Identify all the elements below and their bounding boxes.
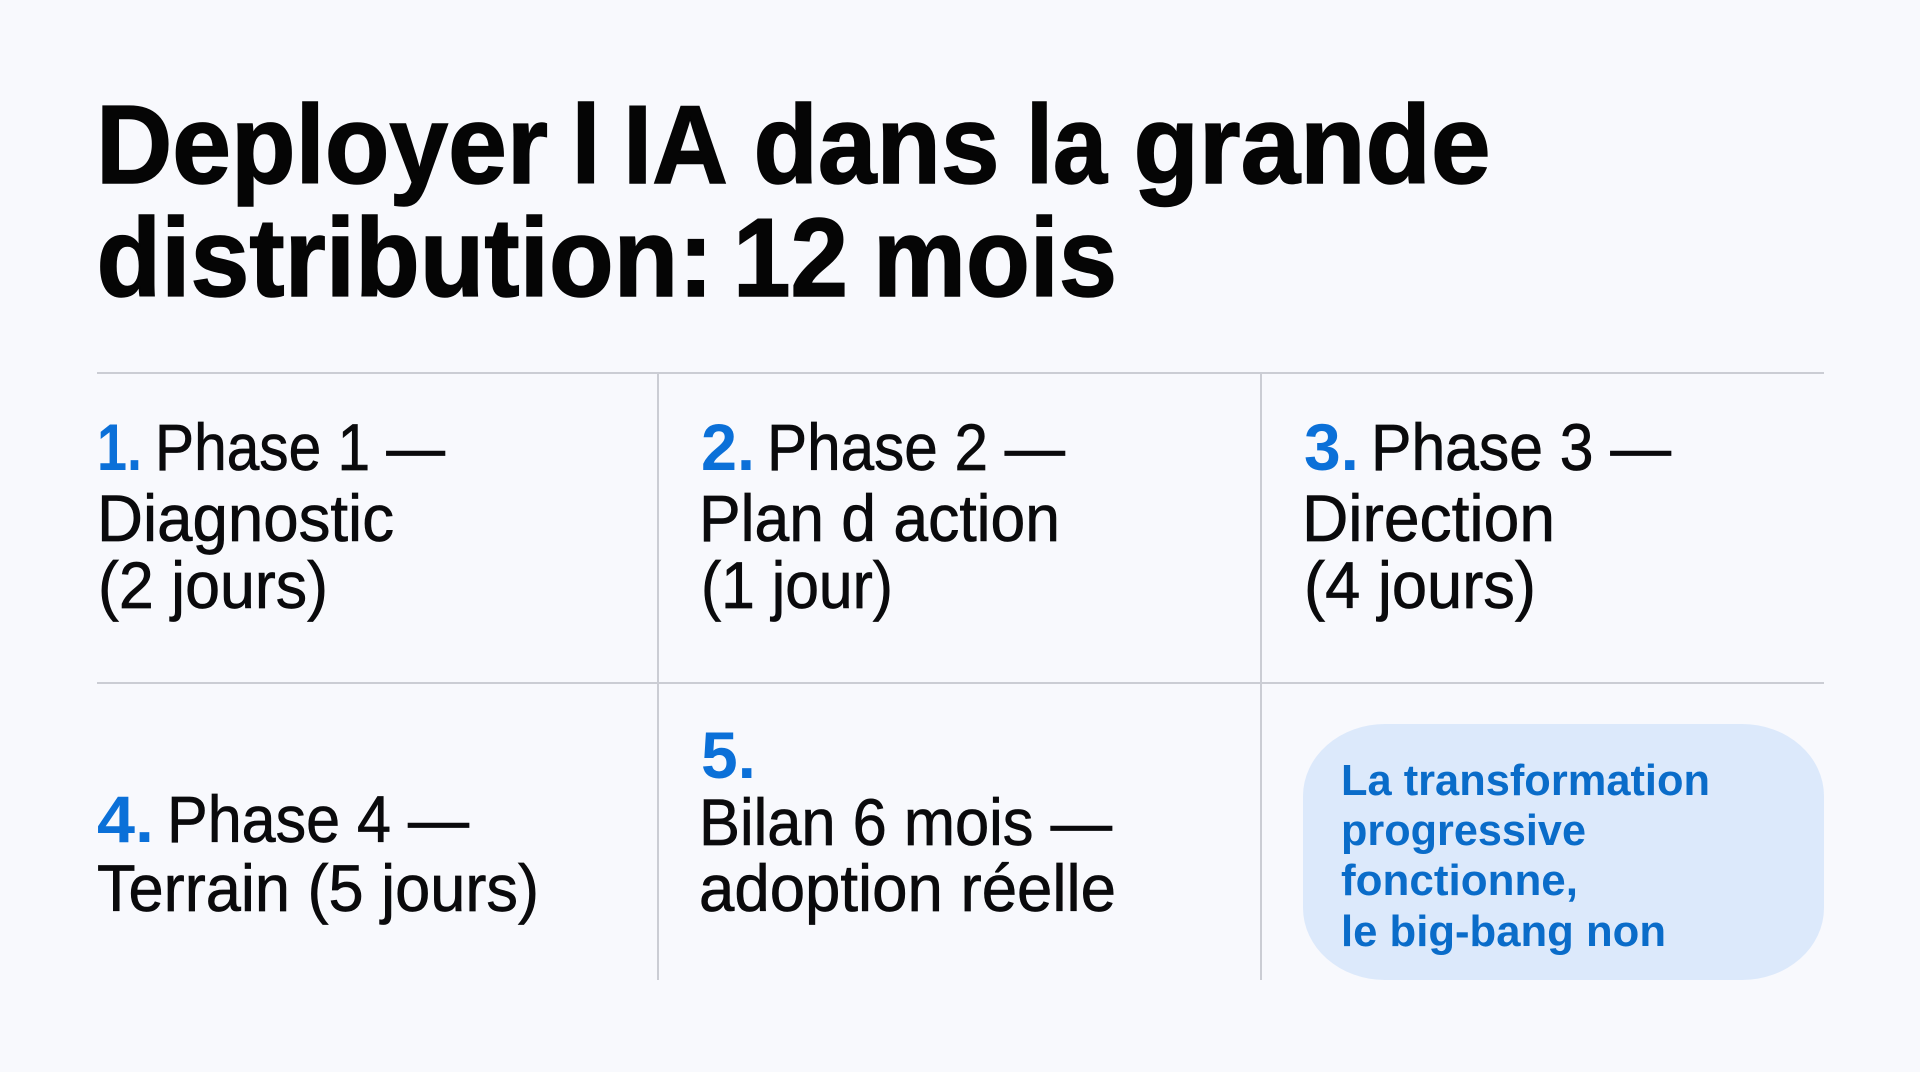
panel: step 4: 4. [97, 782, 154, 856]
panel: step 1: Phase 1 — [155, 410, 445, 484]
panel: step 5 [699, 718, 1116, 925]
panel: step 4: Terrain (5 jours) [97, 851, 539, 925]
callout [1303, 724, 1824, 980]
panel: step 3 [1302, 410, 1671, 622]
title: dans [754, 83, 1000, 207]
callout: le big-bang non [1341, 907, 1666, 956]
title: 12 [733, 196, 848, 320]
title: grande [1134, 83, 1490, 207]
panel: step 3: (4 jours) [1304, 548, 1536, 622]
panel: step 1 [97, 410, 445, 622]
panel: step 2: Plan d action [699, 481, 1060, 555]
panel: step 4 [97, 782, 539, 925]
panel: step 2: Phase 2 — [767, 410, 1065, 484]
panel: step 1: 1. [97, 410, 142, 484]
title: l [571, 83, 601, 207]
panel: step 3: Direction [1302, 481, 1555, 555]
panel: step 2: (1 jour) [701, 548, 893, 622]
title: la [1026, 83, 1108, 207]
title: mois [873, 196, 1117, 320]
panel: step 3: Phase 3 — [1371, 410, 1671, 484]
panel: step 1: Diagnostic [97, 481, 394, 555]
callout: fonctionne, [1341, 856, 1578, 905]
panel: step 5: 5. [701, 718, 756, 792]
title: distribution: [96, 196, 714, 320]
callout: progressive [1341, 806, 1586, 855]
panel: step 3: 3. [1304, 410, 1359, 484]
title [96, 83, 1490, 320]
title: Deployer [96, 83, 548, 207]
panel: step 4: Phase 4 — [167, 782, 469, 856]
panel: step 2 [699, 410, 1065, 622]
panel: step 5: adoption réelle [699, 851, 1116, 925]
panel: step 5: Bilan 6 mois — [699, 785, 1112, 859]
panel: step 2: 2. [701, 410, 755, 484]
panel: step 1: (2 jours) [98, 548, 328, 622]
callout: La transformation [1341, 756, 1710, 805]
title: IA [623, 83, 728, 207]
